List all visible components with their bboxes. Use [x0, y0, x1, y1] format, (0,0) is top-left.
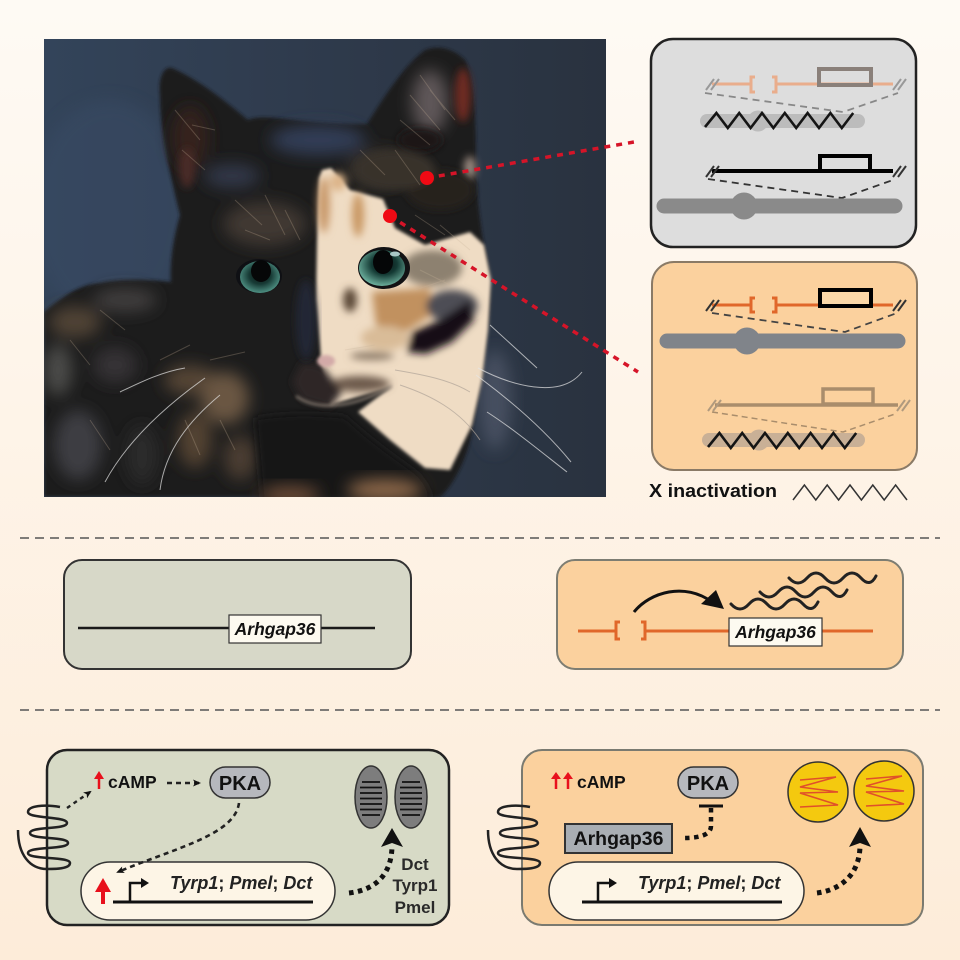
- panel: eumelanin cell: [18, 750, 449, 925]
- panel: Arhgap36 silent: [64, 560, 411, 669]
- arrow: pigment genes to melanosomes: [349, 828, 403, 893]
- inactive orange allele gene: [705, 69, 906, 112]
- inactive allele gene: [708, 389, 910, 432]
- fur streaks: [70, 75, 470, 455]
- icon: pheomelanosomes: [788, 761, 914, 822]
- gene box: [229, 615, 321, 643]
- red callout: dashed pointer to orange panel: [383, 209, 638, 372]
- panel: pheomelanin cell: [488, 750, 923, 925]
- arrow: enhancer activation: [634, 590, 724, 612]
- active X chromosome: [667, 328, 898, 354]
- nose: [317, 355, 335, 367]
- Arhgap36 protein box: Arhgap36: [574, 828, 664, 850]
- legend: X inactivation: [649, 481, 907, 501]
- PKA pill: PKA: [219, 773, 261, 795]
- right eye: [358, 247, 410, 289]
- arrow: receptor to cAMP: [67, 792, 90, 808]
- red callout: dashed pointer to grey panel: [420, 142, 634, 185]
- protein labels: Tyrp1: [392, 876, 438, 895]
- PKA pill: [678, 767, 738, 798]
- active orange allele gene: [706, 290, 906, 332]
- whiskers: [105, 325, 582, 490]
- inhibition of PKA: [683, 806, 723, 838]
- active X chromosome: [664, 192, 895, 220]
- protein labels: Pmel: [395, 898, 435, 917]
- protein labels: Dct: [401, 855, 429, 874]
- arrow: pigment genes to pheomelanosomes: [817, 827, 871, 893]
- dark neck: [255, 414, 432, 500]
- protein labels: [392, 855, 438, 917]
- legend: X inactivation: X inactivation: [649, 481, 777, 501]
- gene box: [729, 618, 822, 646]
- gene box: Arhgap36: [734, 622, 816, 642]
- nucleus with gene: [81, 862, 335, 920]
- nucleus with gene: Tyrp1; Pmel; Dct: [170, 873, 313, 893]
- chin line: [296, 386, 392, 405]
- icon: receptor coil: [18, 806, 70, 869]
- active black allele gene: [706, 156, 906, 198]
- cAMP label: [551, 772, 626, 792]
- Arhgap36 protein box: [565, 824, 672, 853]
- transcripts: [731, 573, 876, 609]
- panel: Arhgap36 expressed: [557, 560, 903, 669]
- gene box: Arhgap36: [234, 619, 316, 639]
- arrow: PKA to nucleus: [118, 803, 239, 872]
- icon: eumelanosomes: [355, 766, 427, 828]
- left eye: [236, 259, 282, 293]
- panel: orange X chromosome (orange fur): [652, 262, 917, 470]
- PKA pill: PKA: [687, 773, 729, 795]
- panel: grey X chromosome (black fur): [651, 39, 916, 247]
- nucleus with gene: Tyrp1; Pmel; Dct: [638, 873, 781, 893]
- inactive X chromosome with zigzag: [708, 430, 858, 450]
- cAMP label: cAMP: [577, 772, 626, 792]
- PKA pill: [210, 767, 270, 798]
- photo: tortoiseshell cat: [30, 39, 606, 504]
- cAMP label: cAMP: [108, 772, 157, 792]
- nucleus with gene: [549, 862, 804, 920]
- inactive X chromosome with zigzag: [705, 110, 858, 132]
- cream face and chest: [316, 168, 491, 470]
- icon: receptor coil: [488, 806, 540, 869]
- arrow: cAMP to PKA: [167, 782, 199, 784]
